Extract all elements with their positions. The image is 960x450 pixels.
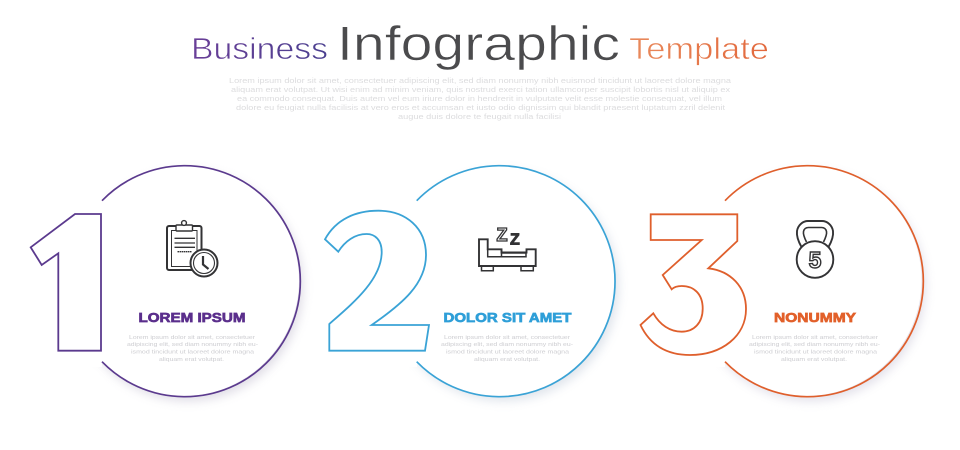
intro paragraph: Lorem ipsum dolor sit amet, consectetuer adipiscing elit, sed diam nonummy nibh euismod tincidunt ut laoreet dolore magna — [229, 76, 732, 85]
description text — [127, 335, 258, 363]
description text: aliquam erat volutpat. — [159, 357, 225, 363]
icon: kettlebell: 5 — [809, 247, 822, 273]
description text: Lorem ipsum dolor sit amet, consectetuer — [129, 335, 255, 341]
numeral 2 — [325, 211, 429, 351]
title: Business — [191, 31, 328, 66]
description text: adipiscing elit, sed diam nonummy nibh eu- — [441, 342, 573, 348]
icon: bed with zzz — [479, 225, 536, 271]
description text: ismod tincidunt ut laoreet dolore magna — [131, 350, 255, 356]
description text — [749, 335, 880, 363]
panel: step 1 — [20, 165, 303, 401]
description text: ismod tincidunt ut laoreet dolore magna — [446, 350, 570, 356]
icon: clipboard with clock — [167, 221, 218, 276]
intro paragraph: dolore eu feugiat nulla facilisis at vero eros et accumsan et iusto odio dignissim qui blandit praesent luptatum zzril delenit — [236, 103, 725, 112]
title: Infographic — [337, 18, 620, 71]
heading: lorem ipsum: LOREM IPSUM — [138, 310, 246, 325]
panel: step 2 — [320, 165, 618, 401]
numeral 3 — [640, 214, 746, 355]
intro paragraph: aliquam erat volutpat. Ut wisi enim ad minim veniam, quis nostrud exerci tation ullamcorper suscipit lobortis nisl ut aliquip ex — [231, 85, 730, 94]
description text: Lorem ipsum dolor sit amet, consectetuer — [444, 335, 570, 341]
heading: nonummy: NONUMMY — [774, 310, 856, 325]
description text: aliquam erat volutpat. — [474, 357, 541, 363]
description text: adipiscing elit, sed diam nonummy nibh eu- — [127, 342, 258, 348]
intro paragraph: ea commodo consequat. Duis autem vel eum iriure dolor in hendrerit in vulputate velit esse molestie consequat, vel illum — [237, 94, 722, 103]
description text — [441, 335, 573, 363]
intro paragraph — [229, 76, 732, 121]
description text: Lorem ipsum dolor sit amet, consectetuer — [752, 335, 878, 341]
description text: ismod tincidunt ut laoreet dolore magna — [754, 350, 878, 356]
description text: aliquam erat volutpat. — [781, 357, 848, 363]
title — [191, 18, 769, 71]
panel: step 3 — [640, 165, 926, 401]
icon: kettlebell — [797, 221, 833, 278]
icon: bed with zzz: Z — [510, 232, 520, 248]
intro paragraph: augue duis dolore te feugait nulla facilisi — [398, 112, 561, 121]
numeral 1 — [31, 214, 101, 351]
description text: adipiscing elit, sed diam nonummy nibh eu- — [749, 342, 880, 348]
icon: bed with zzz: Z — [496, 225, 508, 245]
title: Template — [629, 31, 769, 66]
heading: dolor sit amet: DOLOR SIT AMET — [444, 310, 572, 325]
